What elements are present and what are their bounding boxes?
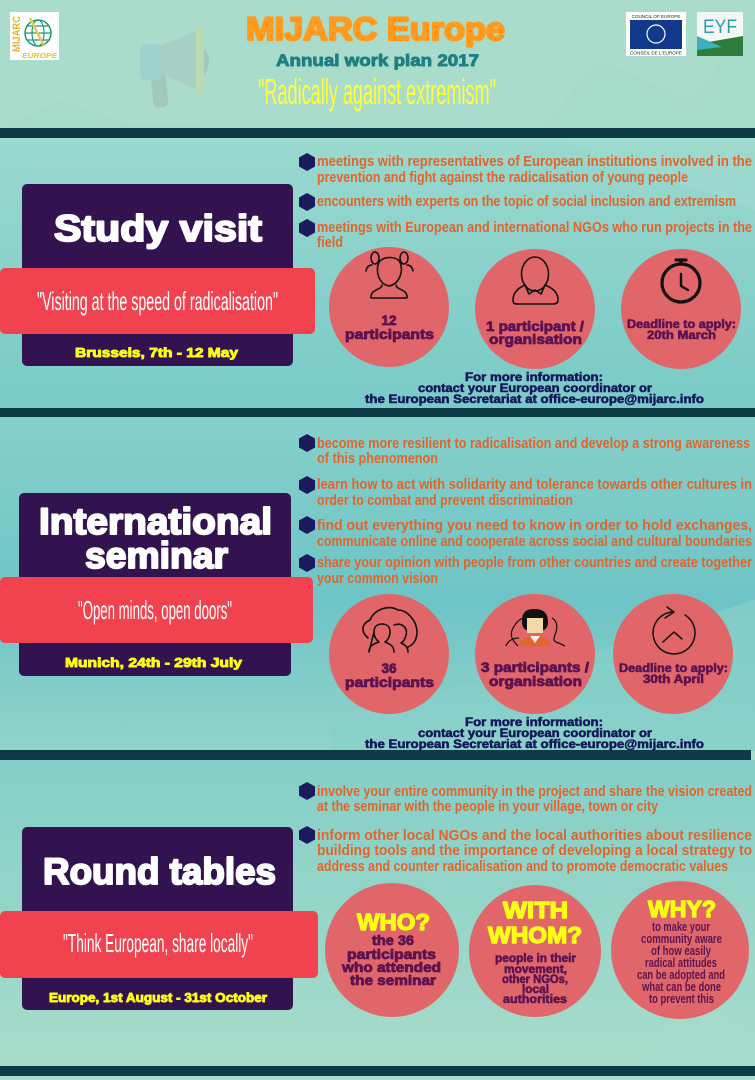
stat: deadline 30th April: 30th April (643, 674, 704, 686)
icon: stopwatch (662, 260, 700, 302)
circle: with whom: other NGOs, (502, 974, 568, 986)
seminar contact information: For more information: (465, 717, 603, 729)
stat: 36 participants: participants (345, 675, 434, 690)
panel: study visit (0, 184, 315, 366)
panel: round tables (0, 827, 318, 1010)
icon: Council of Europe logo (626, 12, 686, 56)
icon: group of people (366, 252, 413, 298)
seminar bullets: order to combat and prevent discrimination (317, 493, 573, 509)
seminar bullets: find out everything you need to know in order to hold exchanges, (317, 518, 752, 534)
round tables heading: Round tables (43, 851, 276, 892)
seminar bullets: your common vision (317, 571, 438, 587)
circle: why: to prevent this (649, 992, 714, 1006)
circle: with whom: WHOM? (488, 922, 582, 948)
seminar bullets: of this phenomenon (317, 451, 438, 467)
icon: megaphone (140, 28, 209, 108)
circle: with whom: local (522, 984, 549, 996)
stat: 3 participants per organisation: organisation (489, 674, 582, 689)
stat: deadline 20th March (621, 249, 741, 369)
circle: why: WHY? (648, 896, 716, 922)
circle: why: community aware (641, 932, 722, 946)
study visit bullets: field (317, 235, 343, 251)
circle: who: the 36 (372, 933, 415, 948)
round tables card (22, 827, 293, 1010)
subtitle: Annual work plan 2017 (276, 51, 479, 70)
stat: deadline 30th April (613, 594, 733, 714)
seminar quote: "Open minds, open doors" (78, 595, 232, 625)
study visit heading: Study visit (54, 208, 262, 249)
study visit quote: "Visiting at the speed of radicalisation" (37, 286, 278, 316)
icon: Council of Europe logo: COUNCIL OF EUROPE (632, 14, 680, 19)
seminar bullets (299, 434, 752, 587)
seminar contact information: contact your European coordinator or (418, 728, 653, 740)
seminar card (19, 493, 291, 676)
icon: people in a cloud (363, 608, 417, 652)
circle: why: radical attitudes (645, 956, 717, 970)
circle: who (325, 883, 459, 1017)
seminar heading (39, 501, 272, 576)
seminar contact information (365, 717, 704, 751)
circle: with whom: authorities (503, 994, 567, 1006)
title: MIJARC Europe (246, 11, 505, 47)
study visit bullets: prevention and fight against the radicalisation of young people (317, 170, 688, 186)
icon: EYF logo (697, 12, 743, 56)
circle: who: who attended (341, 960, 441, 975)
icon: MIJARC Europe logo: MIJARC (11, 16, 23, 52)
circle: who: participants (347, 947, 436, 962)
round tables quote: "Think European, share locally" (63, 928, 253, 958)
stat: 3 participants per organisation: 3 participants / (481, 660, 589, 675)
round tables quote band (0, 911, 318, 978)
icon: MIJARC Europe logo: EUROPE (22, 51, 58, 60)
round tables place and date: Europe, 1st August - 31st October (49, 990, 267, 1005)
panel: international seminar (0, 493, 313, 676)
stat: 1 participant per organisation: 1 participant / (486, 319, 584, 334)
study visit contact information: For more information: (465, 372, 603, 384)
stat: deadline 20th March: Deadline to apply: (627, 319, 736, 331)
seminar contact information: the European Secretariat at office-europe@mijarc.info (365, 739, 704, 751)
tagline: "Radically against extremism" (258, 71, 496, 112)
stat: 12 participants: 12 (381, 313, 397, 328)
icon: Council of Europe logo: CONSEIL DE L'EUROPE (630, 50, 682, 56)
circle: who: the seminar (350, 973, 437, 988)
study visit quote band (0, 268, 315, 334)
icon: EYF logo: EYF (703, 17, 737, 38)
study visit contact information (365, 372, 704, 406)
icon: person (513, 257, 558, 304)
circle: who: WHO? (357, 909, 430, 935)
circle: why: what can be done (641, 980, 721, 994)
circle: with whom (469, 885, 601, 1017)
study visit bullets (299, 153, 752, 251)
icon: MIJARC Europe logo (10, 12, 59, 60)
stat: 12 participants: participants (345, 327, 434, 342)
study visit contact information: the European Secretariat at office-europe@mijarc.info (365, 394, 704, 406)
seminar heading: seminar (85, 535, 228, 576)
circle: with whom: WITH (503, 897, 568, 923)
stat: 36 participants: 36 (381, 661, 397, 676)
stat: 1 participant per organisation: organisation (489, 332, 582, 347)
seminar quote band (0, 577, 313, 643)
study visit place and date: Brussels, 7th - 12 May (75, 345, 239, 360)
round tables bullets: at the seminar with the people in your village, town or city (317, 799, 658, 815)
stat: deadline 20th March: 20th March (647, 330, 716, 342)
circle: why: to make your (652, 920, 710, 934)
icon: circular arrow (653, 607, 695, 654)
circle: why: of how easily (651, 944, 711, 958)
stat: 3 participants per organisation (475, 594, 595, 714)
stat: 12 participants (329, 247, 449, 367)
stat: deadline 30th April: Deadline to apply: (619, 663, 728, 675)
seminar place and date: Munich, 24th - 29th July (65, 655, 243, 670)
circle: with whom: people in their (495, 953, 577, 965)
circle: why: can be adopted and (637, 968, 725, 982)
stat: 1 participant per organisation (475, 249, 595, 369)
study visit contact information: contact your European coordinator or (418, 383, 653, 395)
icon: woman with colleagues (506, 609, 565, 646)
circle: why (611, 881, 749, 1019)
study visit card (22, 184, 293, 366)
circle: with whom: movement, (504, 964, 567, 976)
stat: 36 participants (329, 594, 449, 714)
round tables bullets (299, 782, 752, 875)
seminar heading: International (39, 501, 272, 542)
